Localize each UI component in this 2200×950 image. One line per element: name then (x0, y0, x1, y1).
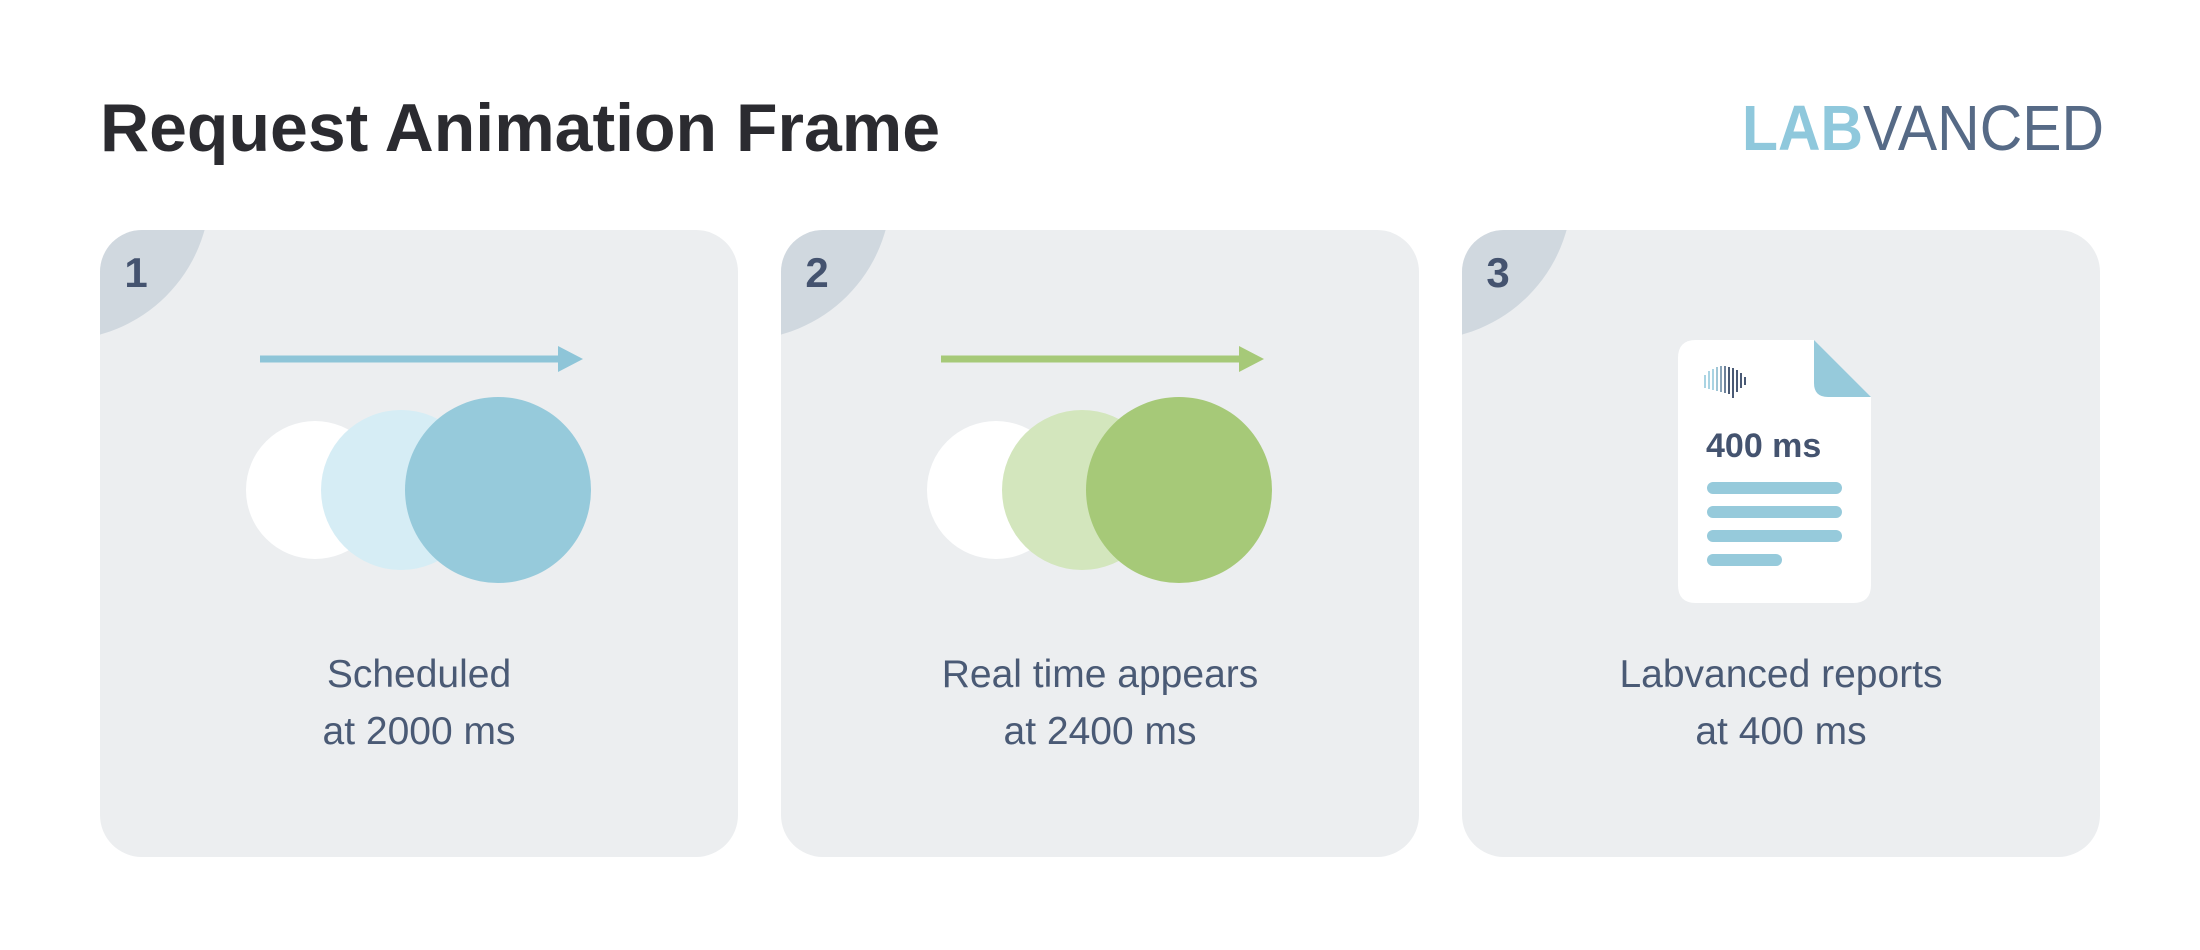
label: at 400 ms (1695, 710, 1867, 753)
panel: 3 labvanced reports (1462, 230, 2100, 857)
label (1619, 653, 1943, 753)
label: Real time appears (942, 653, 1258, 696)
panel: 2 real time (781, 230, 1419, 857)
label (942, 653, 1258, 753)
label: at 2000 ms (323, 710, 515, 753)
icon: document (1678, 340, 1871, 603)
logo: LABVANCED (1742, 92, 2104, 164)
title: Request Animation Frame (100, 90, 940, 166)
label (323, 653, 515, 753)
panel: 1 scheduled (100, 230, 738, 857)
icon: document: 400 ms (1706, 427, 1821, 465)
arrow and circles (246, 346, 591, 583)
number 2: 2 (805, 249, 829, 296)
label: at 2400 ms (1004, 710, 1196, 753)
number 1: 1 (124, 249, 148, 296)
arrow and circles (927, 346, 1272, 583)
label: Labvanced reports (1619, 653, 1943, 696)
label: Scheduled (327, 653, 511, 696)
number 3: 3 (1486, 249, 1510, 296)
